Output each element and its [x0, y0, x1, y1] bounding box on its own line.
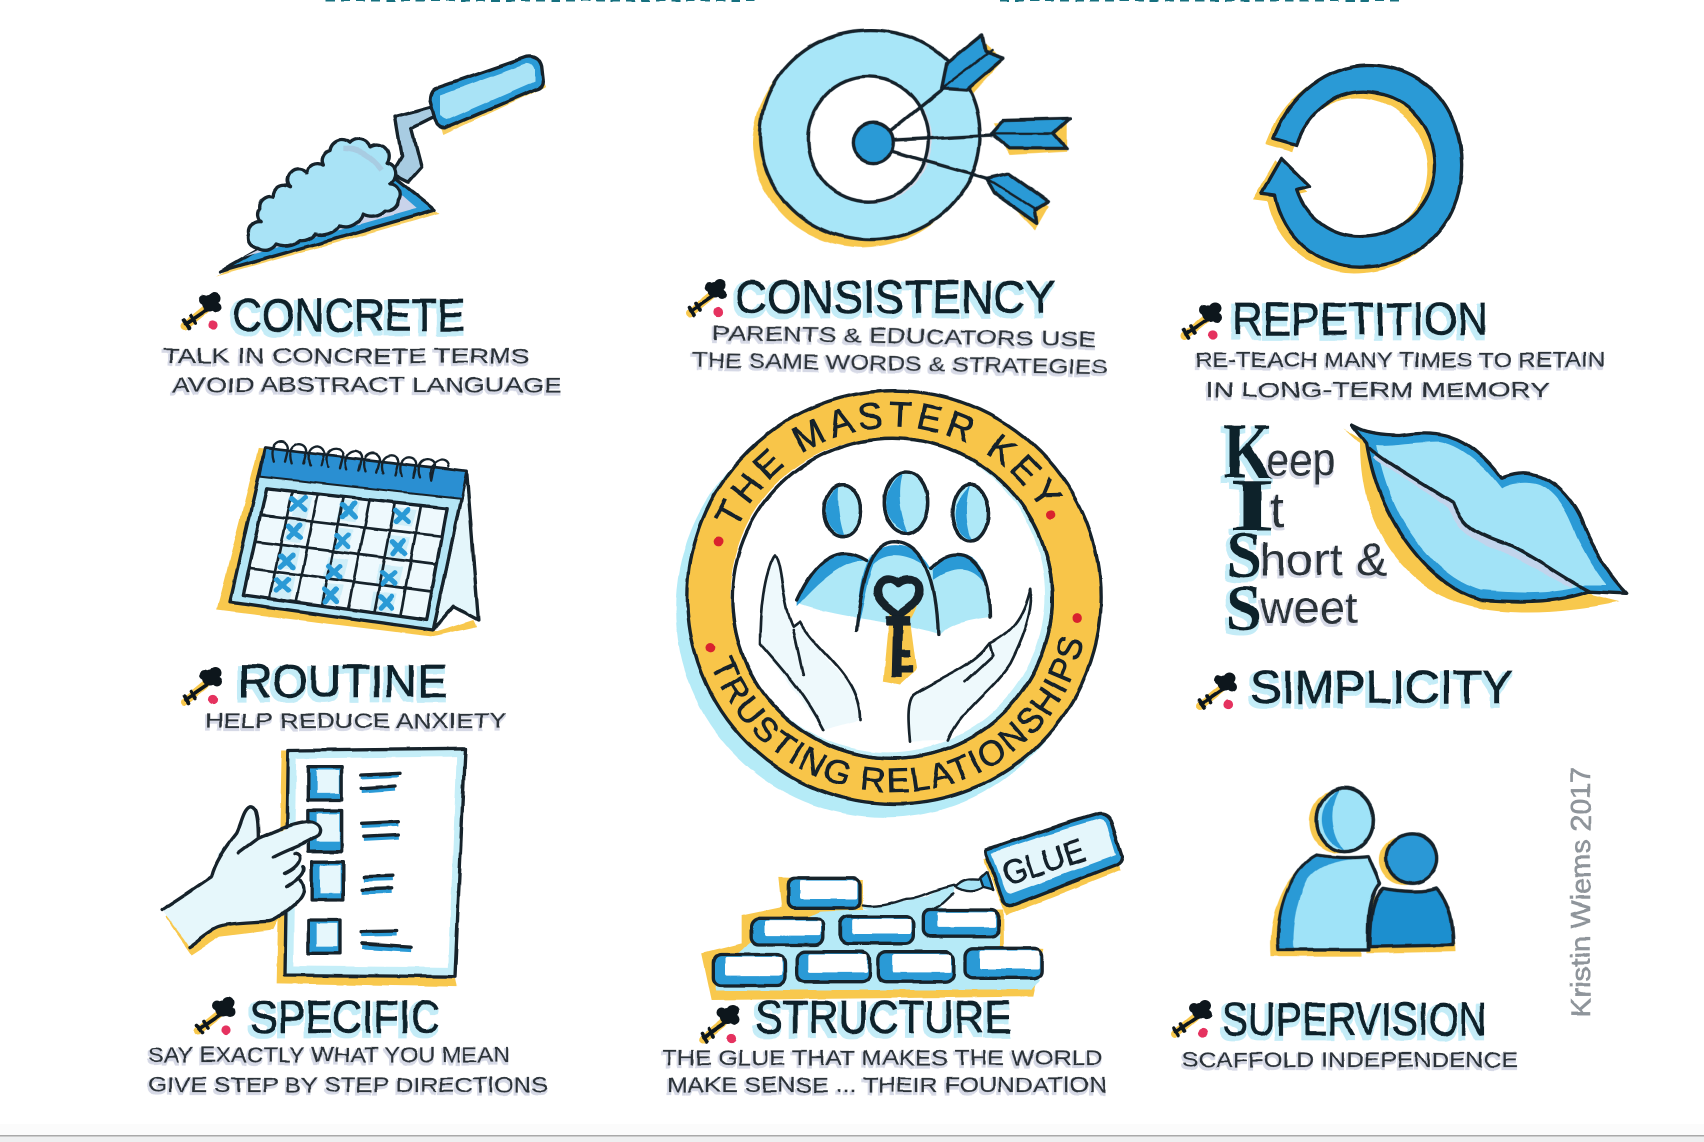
key marker [184, 292, 222, 330]
description: repetition: RE-TEACH MANY TIMES TO RETAIN [1195, 349, 1605, 372]
key marker [184, 667, 222, 705]
KISS acronym: weet [1259, 582, 1359, 633]
key marker [1184, 302, 1222, 340]
icon: adult and child [1271, 788, 1456, 957]
ring text: the master key: THE MASTER KEY [714, 402, 1064, 522]
icon: brick wall and glue bottle: GLUE [998, 832, 1090, 894]
panel: master key centre badge [676, 388, 1103, 818]
heading: specific: SPECIFIC [250, 991, 440, 1043]
description: specific [148, 1044, 548, 1097]
KISS acronym: t [1270, 482, 1284, 538]
icon: three people [797, 472, 990, 635]
KISS acronym: S [1226, 572, 1262, 645]
ring text: trusting relationships: TRUSTING RELATIONSHIPS [714, 636, 1082, 793]
KISS acronym [1223, 408, 1388, 645]
key marker [1174, 1000, 1212, 1038]
icon: heart key [876, 578, 920, 685]
description: specific: SAY EXACTLY WHAT YOU MEAN [148, 1044, 510, 1067]
description: consistency [692, 322, 1108, 379]
panel: structure [662, 814, 1122, 1097]
icon: open hands [760, 555, 1031, 742]
description: repetition [1195, 349, 1605, 402]
badge ring shadow [676, 401, 1092, 817]
heading: supervision: SUPERVISION [1222, 993, 1487, 1045]
icon: trowel [216, 56, 547, 277]
description: concrete: AVOID ABSTRACT LANGUAGE [172, 374, 562, 397]
icon: lips [1343, 425, 1627, 612]
description: structure: THE GLUE THAT MAKES THE WORLD [662, 1047, 1103, 1070]
heading: concrete: CONCRETE [232, 289, 465, 341]
ring dots [706, 510, 1082, 652]
description: supervision: SCAFFOLD INDEPENDENCE [1182, 1049, 1518, 1072]
KISS acronym: S [1226, 519, 1262, 592]
heading: simplicity: SIMPLICITY [1250, 661, 1513, 713]
panel: repetition [1184, 65, 1605, 402]
heading: consistency: CONSISTENCY [735, 271, 1055, 323]
description: specific: GIVE STEP BY STEP DIRECTIONS [148, 1074, 548, 1097]
heading: routine: ROUTINE [238, 655, 448, 707]
description: routine: HELP REDUCE ANXIETY [205, 710, 507, 733]
heading: repetition: REPETITION [1232, 293, 1488, 345]
cropped title remnant [326, 0, 1400, 2]
description: structure [662, 1047, 1107, 1097]
description: structure: MAKE SENSE ... THEIR FOUNDATION [667, 1074, 1107, 1097]
key marker [702, 1005, 740, 1043]
KISS acronym: eep [1266, 434, 1336, 485]
key marker [197, 997, 235, 1035]
key marker [1199, 672, 1237, 710]
artist signature: Kristin Wiems 2017 [1565, 767, 1596, 1017]
key marker [689, 279, 727, 317]
icon: target with arrows [753, 30, 1070, 248]
panel: concrete [163, 56, 562, 397]
panel: specific [148, 748, 548, 1097]
heading: structure: STRUCTURE [755, 991, 1012, 1043]
description: concrete [163, 345, 562, 397]
panel: supervision [1174, 788, 1518, 1072]
panel: simplicity [1199, 408, 1627, 713]
icon: checklist and pointing hand [162, 748, 465, 987]
icon: circular arrow [1256, 65, 1462, 271]
bottom scan edge [0, 1124, 1704, 1142]
description: consistency: THE SAME WORDS & STRATEGIES [692, 349, 1108, 379]
description: consistency: PARENTS & EDUCATORS USE [712, 322, 1096, 352]
icon: desk calendar [217, 442, 478, 637]
panel: routine [184, 442, 507, 733]
badge ring [687, 391, 1101, 804]
icon: brick wall and glue bottle [702, 814, 1122, 1000]
KISS acronym: K [1223, 408, 1273, 496]
KISS acronym: I [1229, 465, 1275, 547]
description: concrete: TALK IN CONCRETE TERMS [163, 345, 530, 368]
KISS acronym: hort & [1260, 534, 1388, 585]
description: repetition: IN LONG-TERM MEMORY [1205, 379, 1550, 402]
panel: consistency [689, 30, 1108, 379]
